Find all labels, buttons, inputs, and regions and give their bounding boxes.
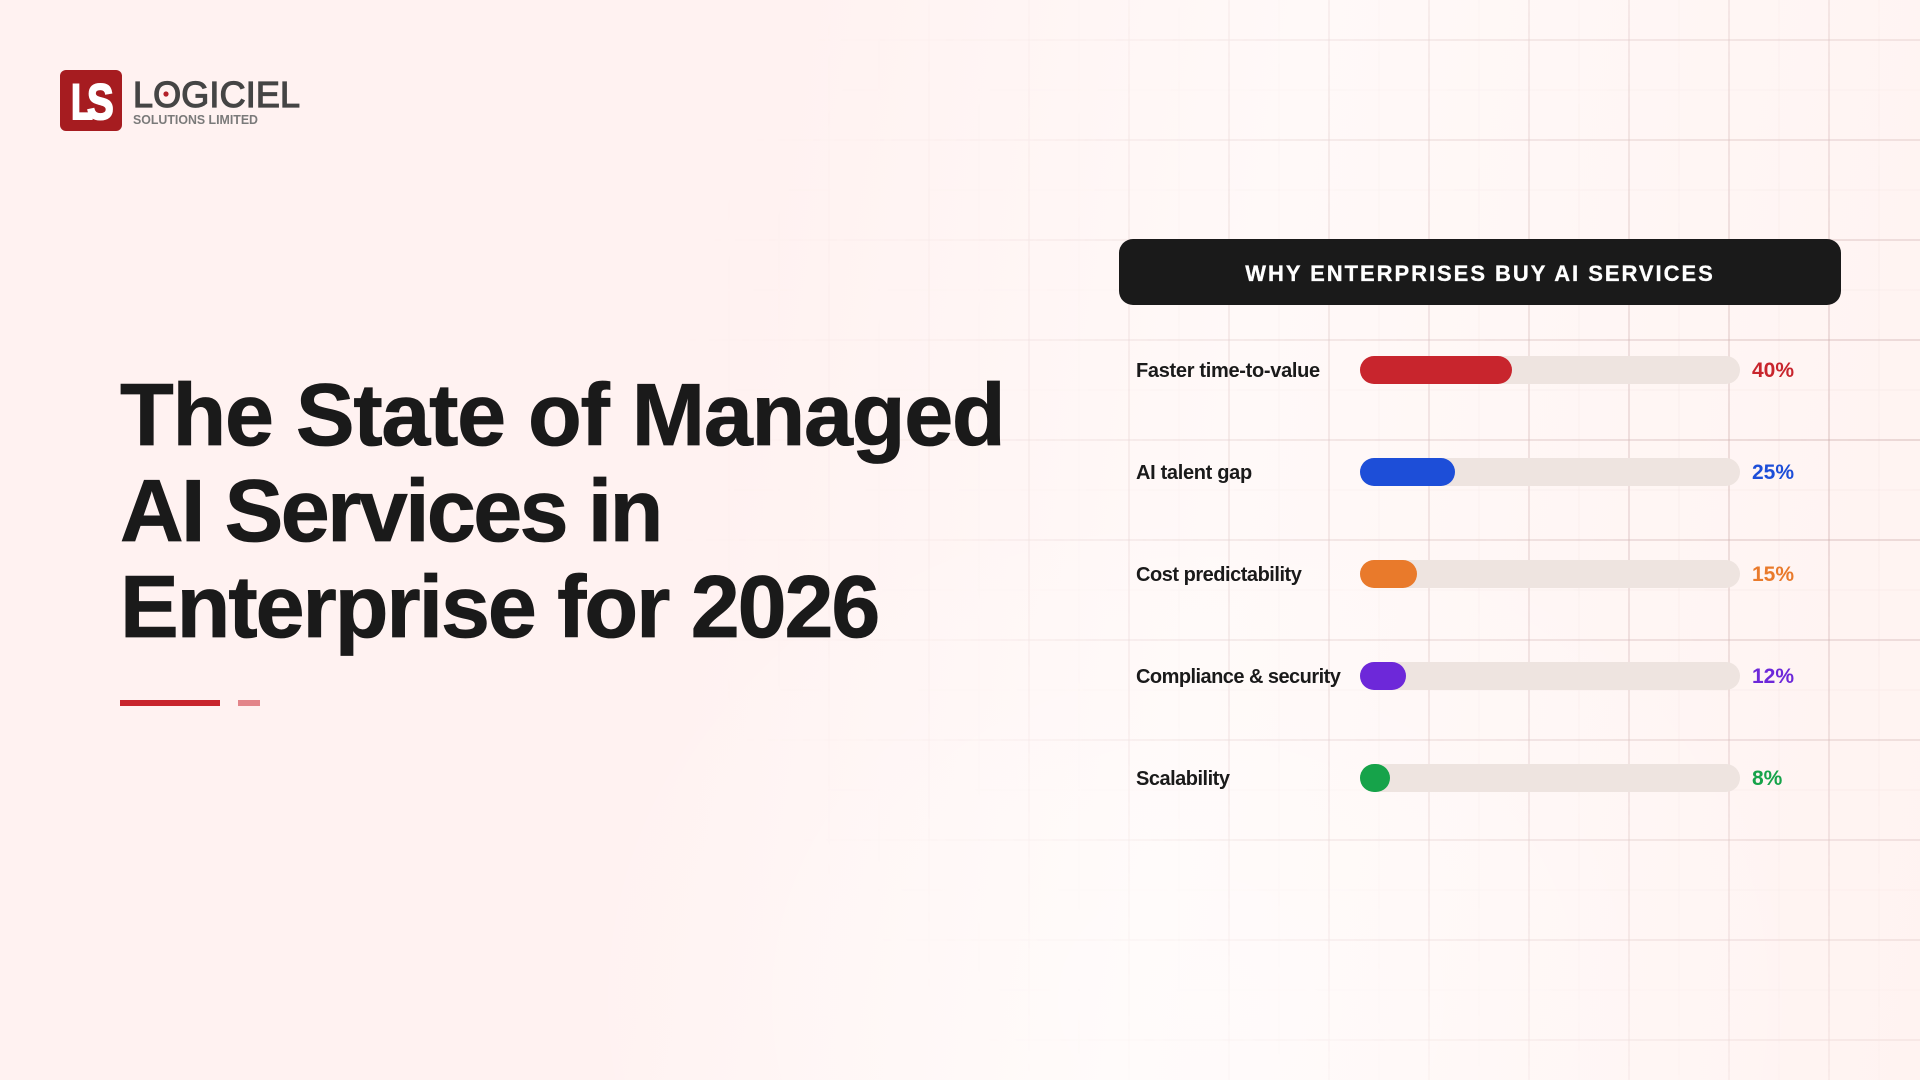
row: Cost predictability 15%: 15% <box>1752 563 1794 586</box>
panel heading: WHY ENTERPRISES BUY AI SERVICES <box>1245 261 1715 286</box>
row: Scalability 8%: Scalability <box>1136 768 1229 790</box>
icon: LS badge: L <box>71 75 93 130</box>
title: Enterprise for 2026 <box>120 557 878 656</box>
row: Faster time-to-value 40% <box>1136 356 1794 384</box>
accent rule: long <box>120 700 220 706</box>
panel heading <box>1119 239 1841 305</box>
title: The State of Managed <box>120 365 1004 464</box>
row: AI talent gap 25%: 25% <box>1752 461 1794 484</box>
row: Cost predictability 15%: Cost predictability <box>1136 564 1301 586</box>
row: Scalability 8% <box>1136 764 1782 792</box>
row: Compliance & security 12%: Compliance & security <box>1136 666 1340 688</box>
icon: LS badge <box>60 70 122 131</box>
row: Compliance & security 12%: 12% <box>1752 665 1794 688</box>
title <box>120 365 1004 656</box>
row: AI talent gap 25%: AI talent gap <box>1136 462 1252 484</box>
row: Faster time-to-value 40%: Faster time-to-value <box>1136 360 1320 382</box>
logo wordmark: LOGICIEL <box>133 74 300 115</box>
accent rule: short <box>238 700 260 706</box>
logo wordmark: SOLUTIONS LIMITED <box>133 112 258 127</box>
row: Compliance & security 12% <box>1136 662 1794 690</box>
title: AI Services in <box>120 461 661 560</box>
row: AI talent gap 25% <box>1136 458 1794 486</box>
row: Scalability 8%: 8% <box>1752 767 1782 790</box>
row: Cost predictability 15% <box>1136 560 1794 588</box>
row: Faster time-to-value 40%: 40% <box>1752 359 1794 382</box>
logo <box>60 70 300 131</box>
icon: LS badge: S <box>87 74 114 130</box>
